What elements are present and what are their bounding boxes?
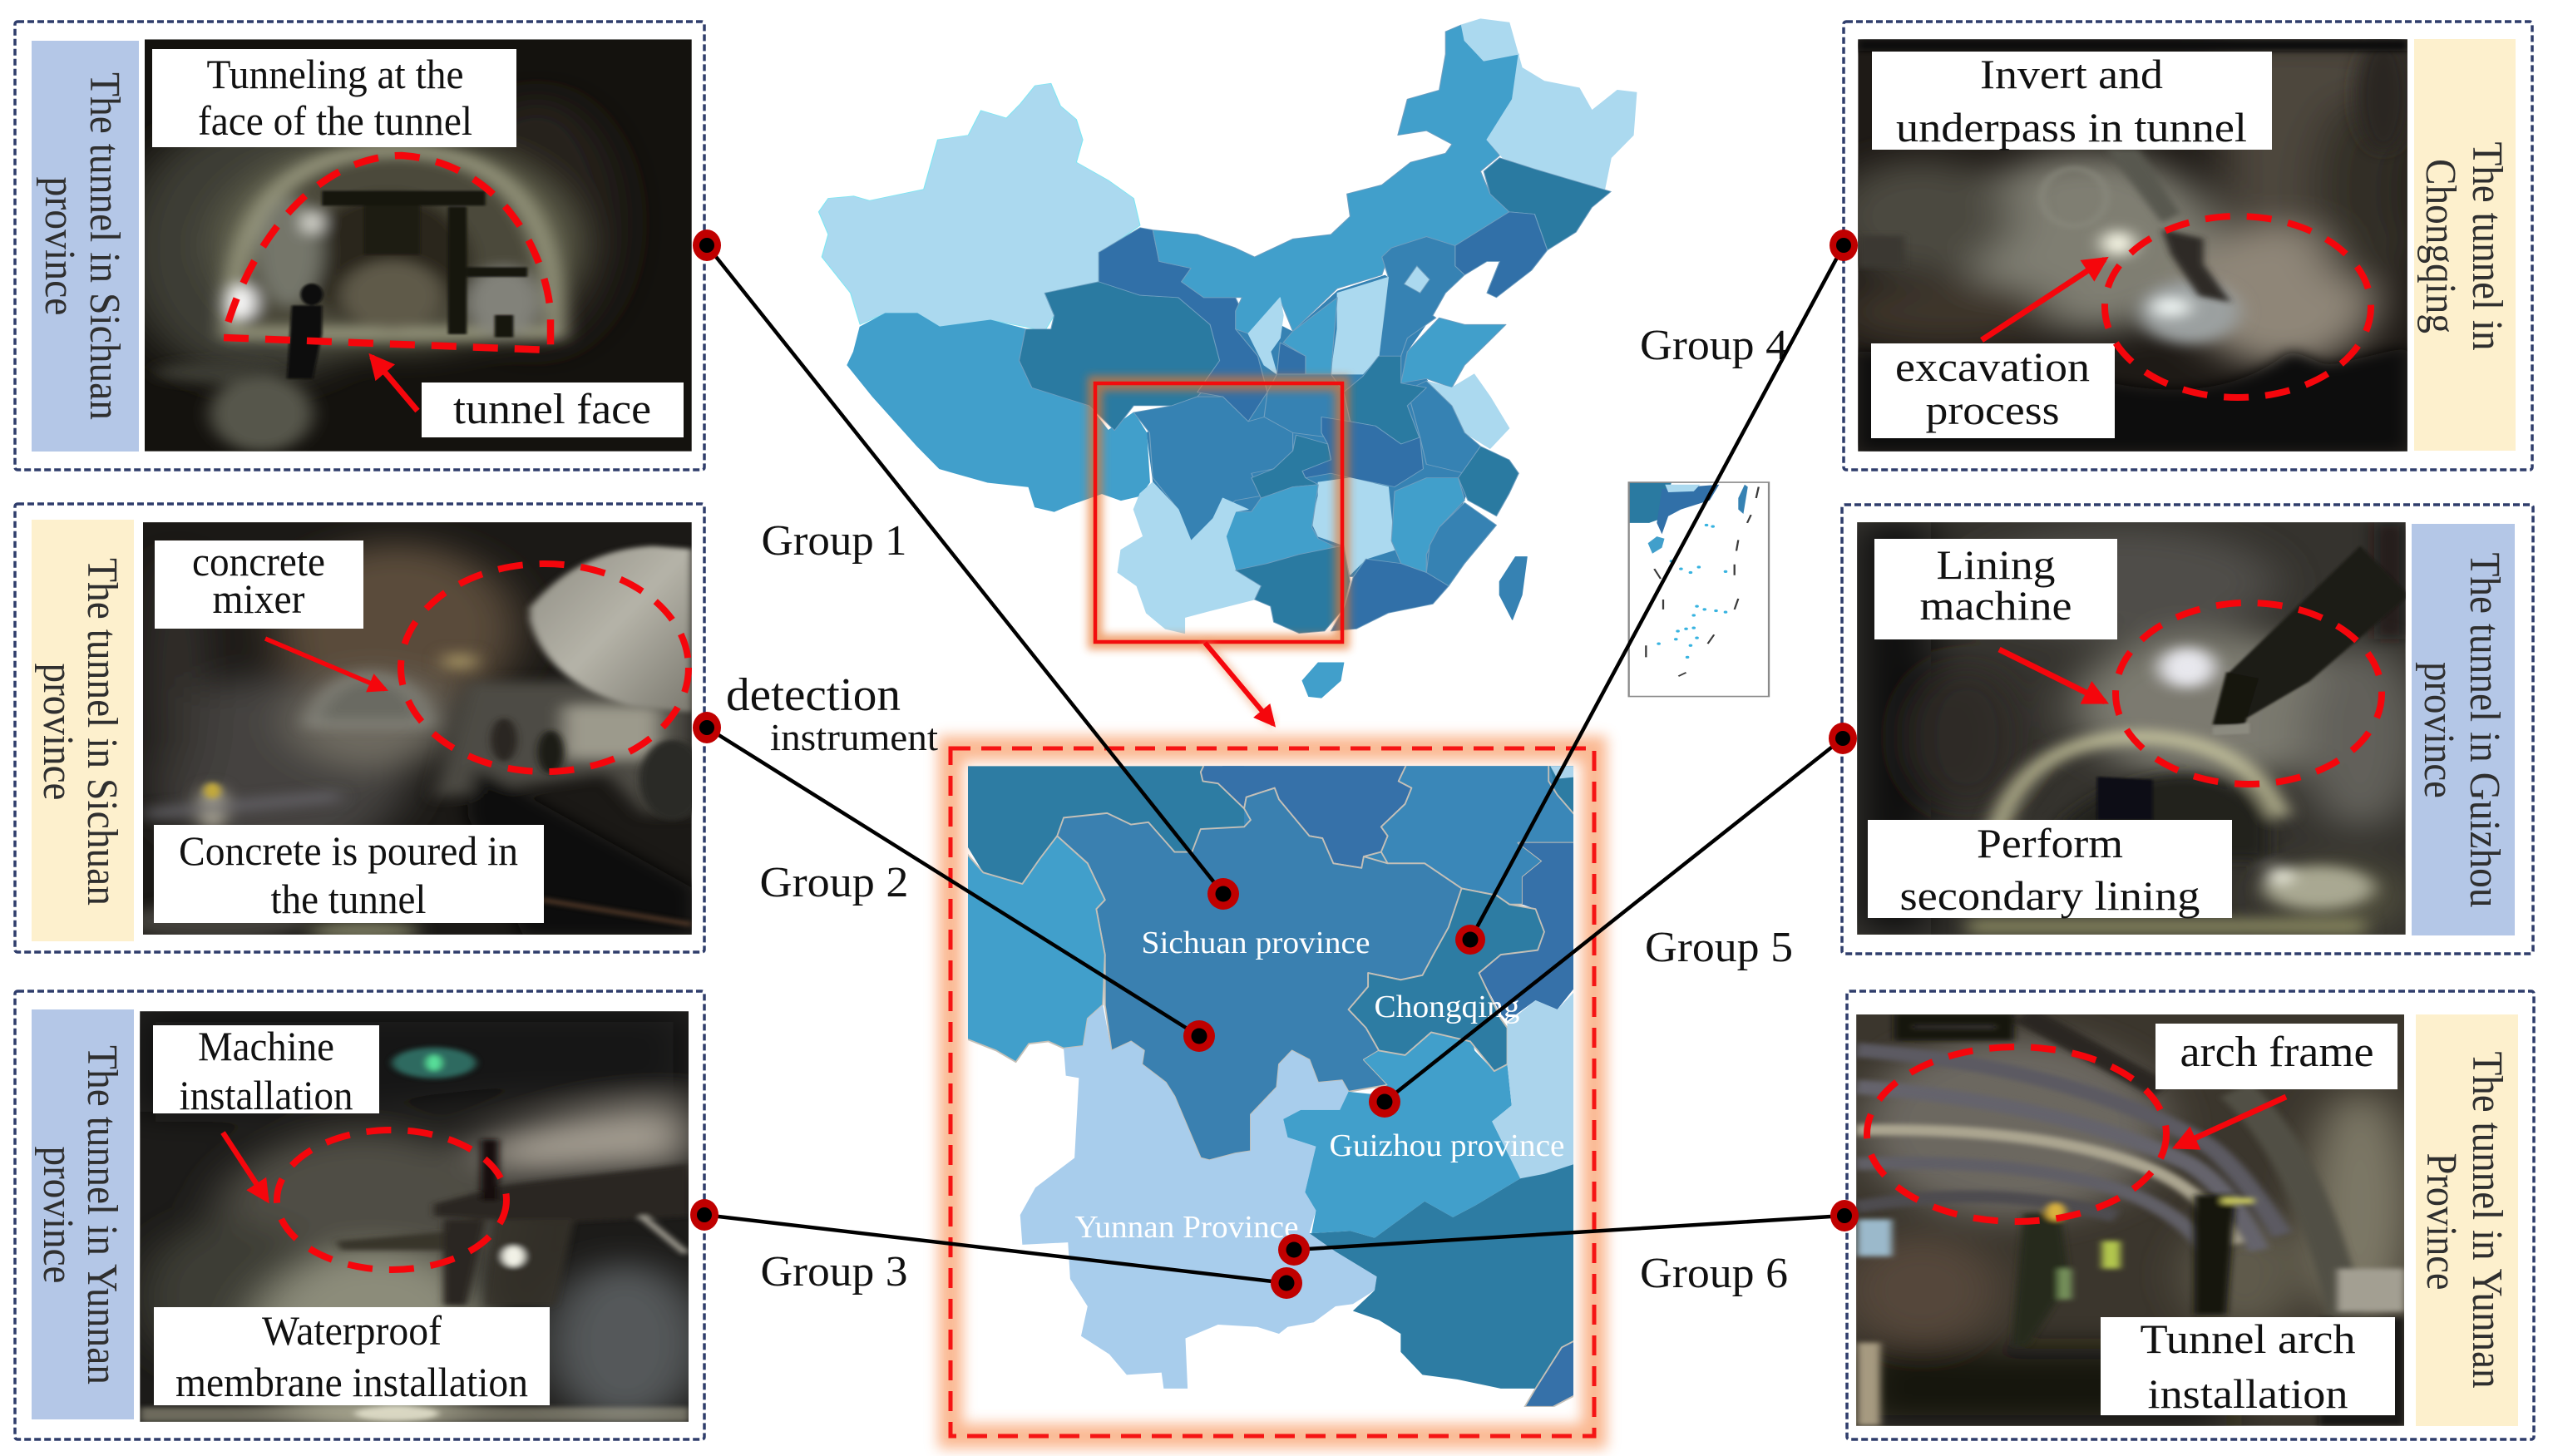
callout: arch frame: [2155, 1024, 2397, 1089]
callout: waterproof membrane: membrane installation: [175, 1359, 528, 1405]
callout: arch installation: Tunnel arch: [2141, 1315, 2355, 1362]
callout: machine installation: Machine: [198, 1023, 334, 1069]
group and instrument labels: Group 6: [1640, 1250, 1788, 1297]
callout: invert: underpass in tunnel: [1896, 104, 2247, 151]
enlarged provinces: [961, 763, 1579, 1407]
callout: secondary lining: [1868, 820, 2232, 919]
arrow: machine: [223, 1133, 267, 1200]
detection point markers: [690, 230, 1859, 1299]
photo: [121, 39, 692, 452]
province labels: Sichuan province: [1141, 925, 1370, 960]
group and instrument labels: detection: [726, 669, 901, 721]
province labels: Guizhou province: [1329, 1128, 1565, 1163]
photo: [1830, 38, 2411, 452]
inset: south china sea: [1629, 482, 1769, 697]
side label: The tunnel in: [2463, 141, 2511, 351]
panel 6: Yunnan arch: [1844, 991, 2534, 1439]
side label: [2416, 1014, 2518, 1426]
red ellipse: machine: [277, 1130, 506, 1270]
group and instrument labels: [726, 322, 1793, 1297]
panel 4: Chongqing invert: [1830, 22, 2532, 470]
callout: machine installation: [153, 1023, 379, 1118]
callout: arch installation: [2101, 1315, 2395, 1417]
panel: enlarged map: [951, 748, 1594, 1436]
red ellipse: excavation: [2105, 216, 2371, 397]
callout: lining machine: machine: [1919, 582, 2072, 629]
photo: [1844, 1014, 2411, 1426]
side label: province: [2415, 662, 2462, 798]
callout: lining machine: [1874, 539, 2117, 639]
red ellipse: lining: [2116, 603, 2382, 784]
arrow: lining: [1999, 649, 2105, 702]
panel 5: Guizhou lining: [1842, 505, 2533, 954]
callout: concrete mixer: [155, 538, 363, 629]
callout: arch frame: arch frame: [2180, 1029, 2373, 1076]
arrow: tunnel face: [372, 357, 417, 411]
group and instrument labels: Group 1: [762, 517, 906, 565]
callout: secondary lining: secondary lining: [1899, 872, 2200, 919]
side label: [32, 520, 134, 941]
red selection box on map: [1095, 383, 1342, 642]
callout: tunneling: face of the tunnel: [198, 97, 472, 144]
callout: tunneling: Tunneling at the: [206, 51, 464, 97]
side label: The tunnel in Sichuan: [78, 558, 126, 906]
side label: The tunnel in Yunnan: [2463, 1051, 2511, 1389]
side label: [32, 41, 139, 452]
callout: invert: Invert and: [1980, 51, 2163, 97]
leader lines: panels to map: [704, 245, 1844, 1283]
panel 1: Sichuan tunnel face: [15, 22, 704, 470]
arrow: excavation: [1982, 259, 2105, 340]
callout: invert: [1872, 51, 2272, 151]
callout: tunnel face: tunnel face: [453, 386, 651, 433]
arrow: mixer: [265, 639, 385, 689]
callout: tunnel face: [422, 383, 684, 437]
callout: excavation: [1871, 343, 2115, 438]
callout: concrete poured: the tunnel: [271, 876, 426, 922]
side label: province: [34, 664, 81, 800]
panel 3: Yunnan waterproof: [15, 991, 704, 1439]
panel 2: Sichuan concrete: [15, 504, 704, 952]
side label: province: [36, 176, 83, 316]
callout: waterproof membrane: Waterproof: [262, 1307, 442, 1354]
callout: lining machine: Lining: [1936, 541, 2056, 588]
side label: The tunnel in Guizhou: [2461, 552, 2508, 908]
red outline: tunnel face: [224, 155, 551, 350]
callout: concrete poured: [154, 825, 544, 923]
callout: concrete mixer: mixer: [213, 575, 305, 622]
photo: [140, 1011, 704, 1435]
group and instrument labels: Group 5: [1645, 924, 1793, 971]
callout: machine installation: installation: [180, 1072, 353, 1118]
arrow: arch: [2176, 1097, 2286, 1147]
callout: waterproof membrane: [154, 1307, 550, 1405]
side label: Chongqing: [2417, 159, 2464, 333]
province labels: Yunnan Province: [1074, 1210, 1299, 1245]
callout: secondary lining: Perform: [1977, 820, 2123, 866]
group and instrument labels: instrument: [770, 716, 938, 758]
china map: [818, 19, 1637, 698]
callout: arch installation: installation: [2147, 1370, 2348, 1417]
side label: [2412, 524, 2515, 935]
province labels: [1074, 925, 1565, 1245]
callout: tunneling: [152, 49, 516, 147]
side label: The tunnel in Yunnan: [78, 1045, 126, 1384]
callout: excavation: excavation: [1895, 343, 2090, 390]
red ellipse: arch: [1867, 1047, 2166, 1222]
side label: [32, 1009, 134, 1419]
group and instrument labels: Group 2: [760, 859, 908, 906]
photo: [1857, 522, 2420, 935]
callout: concrete mixer: concrete: [192, 538, 325, 585]
side label: [2414, 39, 2516, 451]
callout: excavation: process: [1926, 387, 2059, 433]
photo: [121, 522, 704, 940]
side label: province: [34, 1146, 81, 1284]
red ellipse: mixer: [401, 564, 689, 772]
group and instrument labels: Group 4: [1640, 322, 1788, 369]
side label: The tunnel in Sichuan: [81, 72, 128, 420]
province labels: Chongqing: [1374, 990, 1520, 1024]
callout: concrete poured: Concrete is poured in: [179, 827, 518, 874]
group and instrument labels: Group 3: [760, 1248, 908, 1296]
side label: Province: [2417, 1152, 2465, 1291]
arrow: box to enlarged map: [1205, 643, 1273, 724]
